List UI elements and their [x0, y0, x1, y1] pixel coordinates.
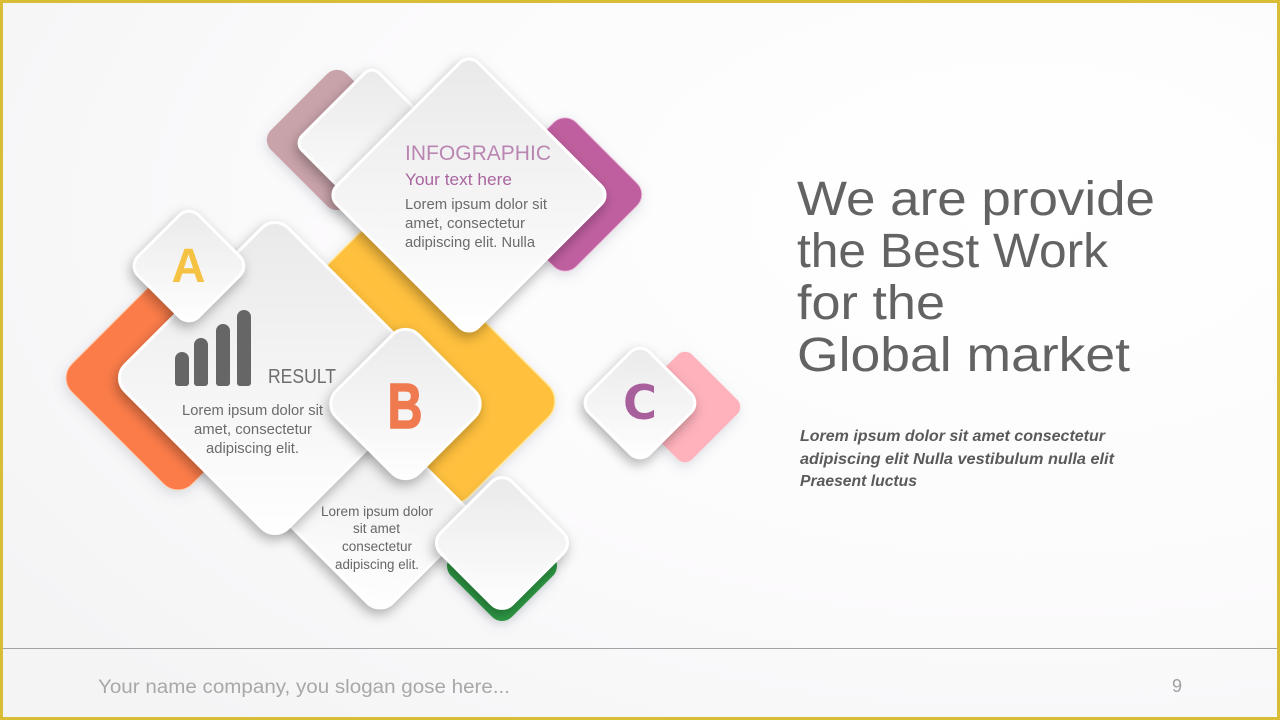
diamond B — [323, 322, 488, 486]
lower text card — [234, 372, 477, 615]
B card — [323, 322, 488, 486]
diamond group C — [580, 343, 744, 466]
lower card text — [321, 504, 434, 572]
diamond green — [431, 472, 573, 627]
italic description — [800, 428, 1115, 490]
main title: Global market — [797, 329, 1130, 382]
result text: amet, consectetur — [194, 422, 312, 438]
infographic text: Lorem ipsum dolor sit — [405, 197, 547, 213]
infographic text — [405, 197, 547, 251]
infographic card shape — [328, 54, 610, 336]
result text — [182, 403, 323, 457]
result heading: RESULT — [268, 366, 336, 388]
result text: adipiscing elit. — [206, 441, 299, 457]
A card — [129, 206, 249, 326]
green diamond — [441, 505, 563, 627]
main title: We are provide — [797, 173, 1155, 226]
infographic text: amet, consectetur — [405, 216, 525, 232]
infographic card — [328, 54, 610, 336]
result text: Lorem ipsum dolor sit — [182, 403, 323, 419]
result card — [112, 215, 438, 541]
C card — [580, 343, 700, 463]
letter B: B — [388, 370, 422, 442]
orange diamond — [58, 258, 298, 498]
main title: the Best Work — [797, 225, 1109, 278]
page number: 9 — [1172, 676, 1182, 696]
infographic heading: INFOGRAPHIC — [405, 142, 551, 165]
yellow panel — [266, 215, 564, 513]
main title — [797, 173, 1155, 382]
footer slogan: Your name company, you slogan gose here... — [98, 677, 510, 698]
small card — [431, 472, 573, 614]
lower card text: sit amet — [353, 521, 400, 536]
letter C: C — [623, 376, 657, 431]
rose diamond — [261, 64, 413, 216]
lower card text: adipiscing elit. — [335, 557, 419, 572]
italic description: adipiscing elit Nulla vestibulum nulla elit — [800, 451, 1115, 468]
lower card text: consectetur — [342, 539, 412, 554]
lower card shape — [234, 372, 477, 615]
letter A: A — [172, 240, 206, 293]
infographic subheading: Your text here — [405, 170, 512, 189]
main title: for the — [797, 277, 945, 330]
lower card text: Lorem ipsum dolor — [321, 504, 434, 519]
purple diamond — [482, 111, 648, 278]
italic description: Praesent luctus — [800, 473, 917, 490]
result card shape — [112, 215, 438, 541]
diamond A — [129, 206, 249, 326]
icon: bar chart — [175, 310, 251, 386]
italic description: Lorem ipsum dolor sit amet consectetur — [800, 428, 1106, 445]
pink diamond — [626, 348, 744, 466]
light card behind infographic — [295, 66, 449, 220]
infographic text: adipiscing elit. Nulla — [405, 235, 536, 251]
